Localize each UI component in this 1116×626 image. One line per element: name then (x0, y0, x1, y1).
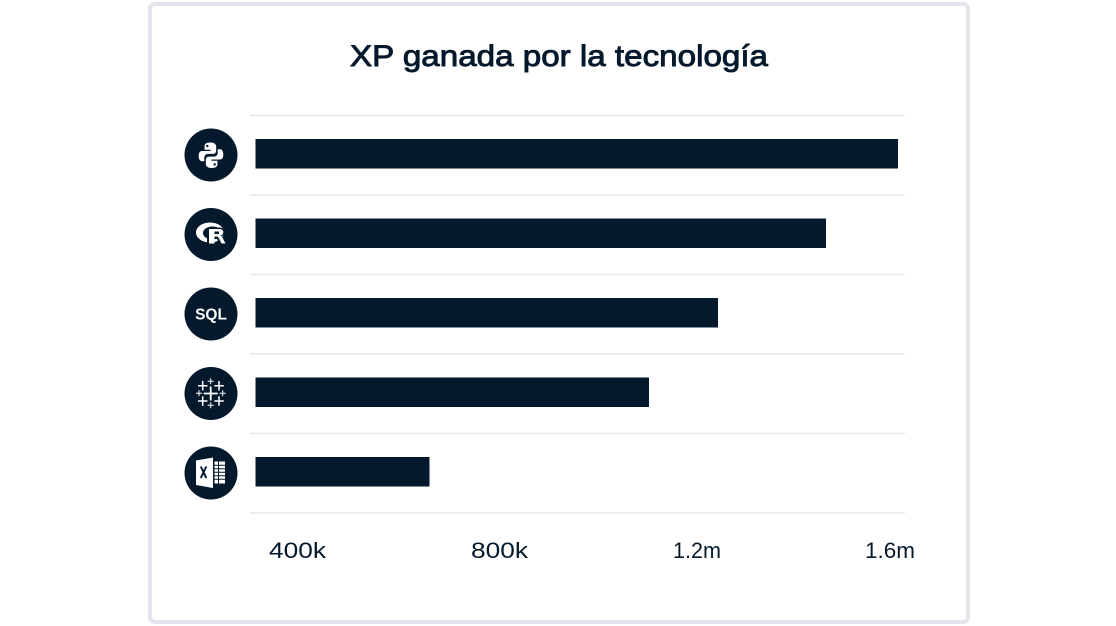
bar: Excel (256, 457, 430, 486)
icon: SQL: SQL (195, 306, 227, 324)
icon: R (184, 208, 238, 261)
panel: chart card (150, 4, 968, 622)
icon: Tableau (184, 367, 238, 420)
label: 1.6m: 1.6m (865, 538, 915, 563)
icon: SQL (184, 288, 238, 340)
icon: Excel (184, 446, 238, 500)
label: 400k: 400k (269, 538, 327, 563)
icon: Python (184, 128, 238, 182)
label: 1.2m: 1.2m (673, 538, 721, 563)
axis labels (269, 538, 915, 563)
title: XP ganada por la tecnología (350, 40, 768, 73)
grid lines (250, 116, 905, 513)
bar: Python (256, 139, 898, 168)
bar: R (256, 218, 826, 248)
label: 800k: 800k (471, 538, 529, 563)
bar: SQL (256, 298, 718, 328)
bar chart (256, 139, 898, 486)
bar: Tableau (256, 378, 649, 407)
